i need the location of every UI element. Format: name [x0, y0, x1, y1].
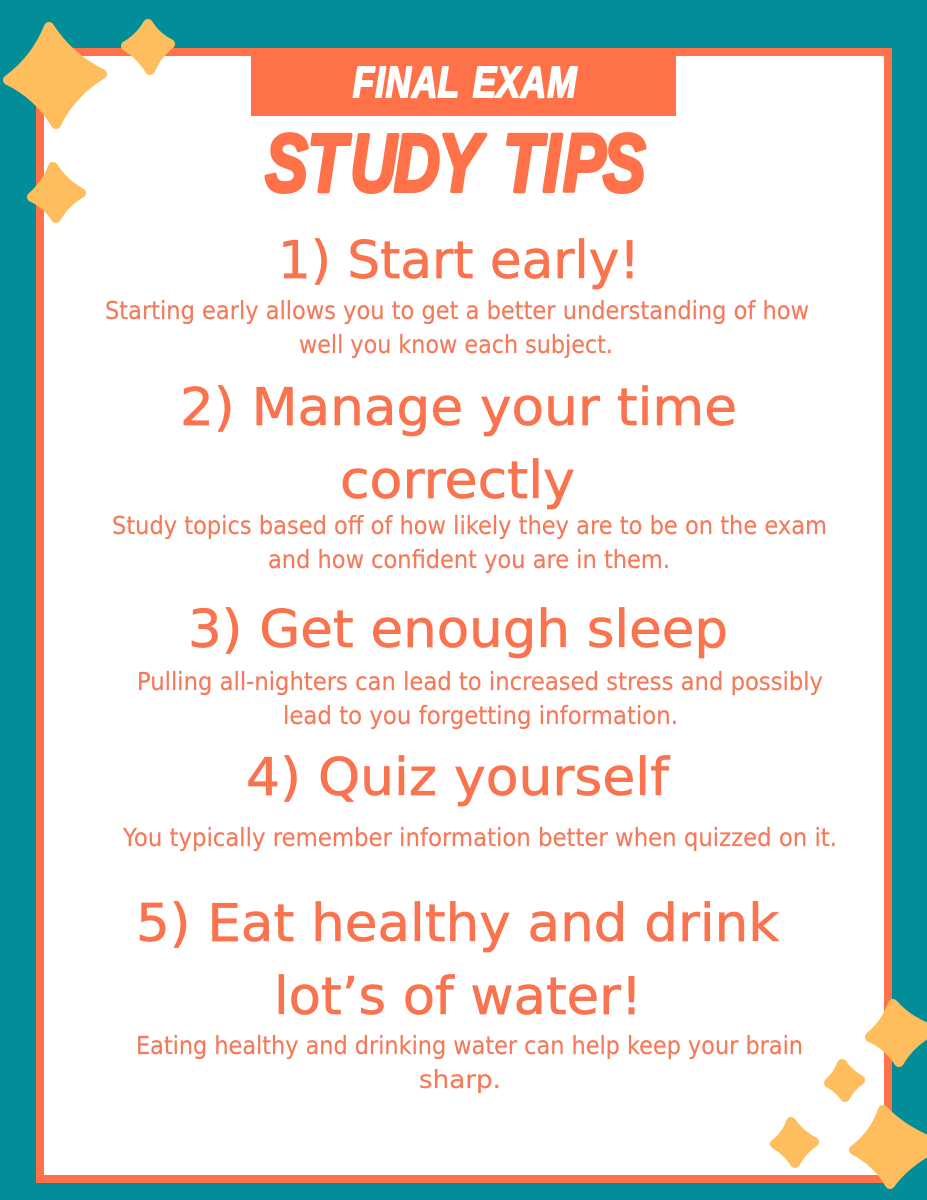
- sparkles: top left: [8, 24, 170, 218]
- banner: final exam: [251, 56, 676, 116]
- tip 1: 1) Start early!: [278, 231, 640, 291]
- tip 4: [122, 748, 837, 852]
- title: study tips: STUDY TIPS: [265, 116, 646, 209]
- tip 5: Eating healthy and drinking water can help keep your brain: [136, 1031, 803, 1060]
- tip 1: [105, 231, 809, 359]
- tip 5: 5) Eat healthy and drink: [136, 894, 779, 954]
- sparkles: bottom right: [775, 1004, 927, 1184]
- tip 3: [137, 600, 823, 730]
- tip 2: [112, 378, 827, 574]
- tip 5: lot’s of water!: [274, 967, 642, 1027]
- tip 4: You typically remember information better when quizzed on it.: [122, 823, 837, 852]
- tip 3: 3) Get enough sleep: [188, 600, 728, 660]
- tip 5: sharp.: [419, 1065, 501, 1094]
- tip 3: Pulling all-nighters can lead to increased stress and possibly: [137, 667, 823, 696]
- tip 3: lead to you forgetting information.: [283, 701, 678, 730]
- tip 2: Study topics based off of how likely they are to be on the exam: [112, 511, 827, 540]
- tip 4: 4) Quiz yourself: [246, 748, 671, 808]
- tip 2: correctly: [340, 451, 575, 511]
- banner: final exam: FINAL EXAM: [353, 58, 577, 107]
- tip 1: Starting early allows you to get a better understanding of how: [105, 296, 809, 325]
- tip 2: 2) Manage your time: [180, 378, 737, 438]
- tip 1: well you know each subject.: [299, 330, 613, 359]
- tip 5: [136, 894, 803, 1094]
- tip 2: and how confident you are in them.: [268, 545, 670, 574]
